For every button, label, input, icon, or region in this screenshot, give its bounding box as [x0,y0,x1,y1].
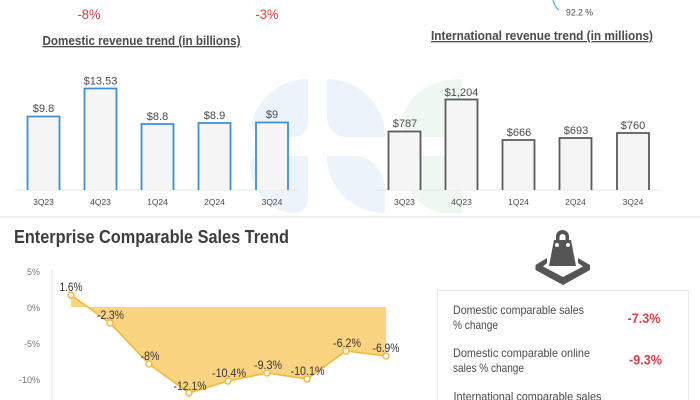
watermark logo [250,79,462,213]
domestic change: -8%: -8% [78,7,100,22]
data labels: -10.1% [290,366,324,378]
area fill [71,295,386,393]
bar chart: domestic revenue [15,76,298,207]
metric: domestic comparable online sales: -9.3% [629,352,662,368]
data labels: -8% [140,351,160,363]
bar chart: international revenue: 3Q24 [623,197,644,207]
data labels: -2.3% [97,310,124,322]
trend line [71,295,386,393]
icon: shopping bag on tray [536,230,590,285]
bar chart: international revenue: 1Q24 [508,197,529,207]
panel: comparable sales metrics [438,290,688,400]
heading: international revenue trend: International revenue trend (in millions) [431,28,653,43]
data labels [60,282,400,393]
section divider band [0,216,700,218]
bar chart: international revenue: $693 [564,125,588,137]
bar chart: domestic revenue: 4Q23 [90,197,111,207]
y axis: 5% [27,267,40,277]
data labels: -6.9% [372,343,400,355]
data labels: -9.3% [254,360,282,372]
metric: domestic comparable sales: Domestic comparable sales [453,303,584,317]
bar chart: international revenue: 4Q23 [451,197,472,207]
data labels: -6.2% [333,338,361,350]
heading: domestic revenue trend: Domestic revenue trend (in billions) [42,33,240,48]
y axis: -10% [19,375,40,385]
data labels: 1.6% [60,282,82,294]
bar chart: domestic revenue: 3Q24 [262,197,283,207]
bar chart: domestic revenue: $8.8 [147,111,168,123]
data labels: -12.1% [174,381,206,393]
metric: domestic comparable online sales: Domestic comparable online [453,346,590,360]
domestic change: -3%: -3% [256,7,278,22]
heading: enterprise comparable sales trend: Enterprise Comparable Sales Trend [14,227,289,247]
arc and label: 92.2 % [553,0,594,18]
bar chart: international revenue: 3Q23 [394,197,415,207]
bar chart: domestic revenue: 3Q23 [33,197,54,207]
bar chart: domestic revenue: 2Q24 [204,197,225,207]
bar chart: domestic revenue: 1Q24 [147,197,168,207]
y axis: -5% [24,339,40,349]
area line chart: comparable sales [19,267,400,400]
data labels: -10.4% [212,368,246,380]
metric: domestic comparable sales: % change [453,318,498,332]
y axis [19,267,52,400]
bar chart: international revenue: $787 [393,118,417,130]
metric: domestic comparable sales [453,303,661,332]
bar chart: domestic revenue: $9.8 [33,103,54,115]
bar chart: domestic revenue: $9 [266,109,278,121]
bar chart: domestic revenue: $8.9 [204,110,225,122]
bar chart: international revenue: $1,204 [445,87,478,99]
bar chart: international revenue: 2Q24 [565,197,586,207]
bar chart: international revenue: $666 [507,127,531,139]
data points [68,292,389,396]
bar chart: international revenue [376,87,661,207]
metric: domestic comparable sales: -7.3% [628,310,661,326]
metric: domestic comparable online sales [453,346,662,375]
bar chart: domestic revenue: $13.53 [84,76,117,88]
y axis: 0% [27,303,40,313]
arc and label: 92.2 %: 92.2 % [566,8,594,18]
metric: domestic comparable online sales: sales % change [453,361,524,375]
bar chart: international revenue: $760 [621,120,645,132]
